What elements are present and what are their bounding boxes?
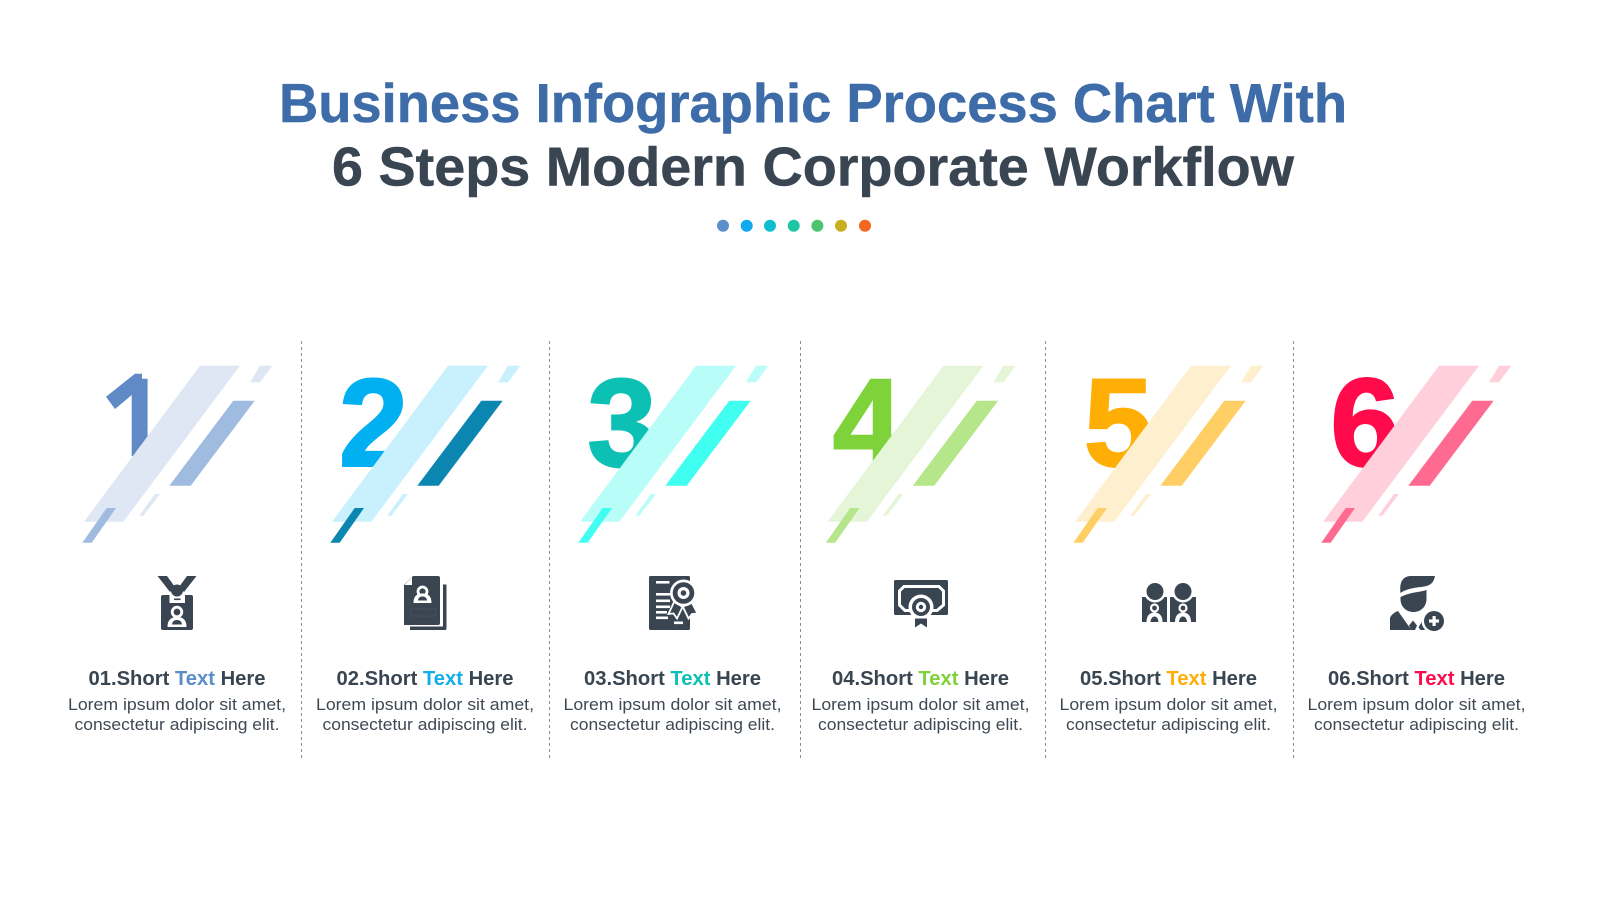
icon: two employee badges xyxy=(1142,580,1196,622)
icon: profile documents xyxy=(404,576,446,630)
step 1 text: 01.Short Text Here xyxy=(88,668,266,690)
step 6 numeral with stripes: 6 xyxy=(1330,354,1400,493)
step 4 numeral with stripes xyxy=(826,354,1016,543)
step 5 numeral with stripes: 5 xyxy=(1084,354,1153,493)
step 4 text xyxy=(812,668,1030,734)
step 2 text: Lorem ipsum dolor sit amet, xyxy=(316,695,534,714)
title: 6 Steps Modern Corporate Workflow xyxy=(332,136,1295,198)
step 4 text: Lorem ipsum dolor sit amet, xyxy=(812,695,1030,714)
step 1 text xyxy=(68,668,286,734)
step 6 text: consectetur adipiscing elit. xyxy=(1314,715,1519,734)
icon: add employee xyxy=(1390,576,1446,634)
step 5 text xyxy=(1060,668,1278,734)
step 3 numeral with stripes: 3 xyxy=(587,354,657,493)
title: Business Infographic Process Chart With xyxy=(279,73,1347,134)
step 1 numeral with stripes xyxy=(82,354,272,543)
step 4 text: consectetur adipiscing elit. xyxy=(818,715,1023,734)
icon: certificate with seal xyxy=(649,576,698,630)
step 5 text: 05.Short Text Here xyxy=(1080,668,1257,690)
title xyxy=(279,73,1347,198)
colored dots row xyxy=(717,220,871,232)
step 1 text: Lorem ipsum dolor sit amet, xyxy=(68,695,286,714)
step 6 text: Lorem ipsum dolor sit amet, xyxy=(1308,695,1526,714)
step 5 text: consectetur adipiscing elit. xyxy=(1066,715,1271,734)
step 3 text xyxy=(564,668,782,734)
step 2 text xyxy=(316,668,534,734)
step 1 text: consectetur adipiscing elit. xyxy=(74,715,280,734)
step 3 text: Lorem ipsum dolor sit amet, xyxy=(564,695,782,714)
icon: diploma with ribbon xyxy=(894,580,948,628)
step 5 numeral with stripes xyxy=(1073,354,1263,543)
step 2 text: 02.Short Text Here xyxy=(336,668,513,690)
step 2 text: consectetur adipiscing elit. xyxy=(322,715,528,734)
step 2 numeral with stripes xyxy=(330,354,520,543)
step 2 numeral with stripes: 2 xyxy=(339,354,408,493)
step 6 text xyxy=(1308,668,1526,734)
step 6 text: 06.Short Text Here xyxy=(1328,668,1505,690)
step 3 text: consectetur adipiscing elit. xyxy=(570,715,775,734)
icon: ID badge on lanyard xyxy=(158,576,196,630)
step 3 numeral with stripes xyxy=(578,354,768,543)
step 5 text: Lorem ipsum dolor sit amet, xyxy=(1060,695,1278,714)
step 4 numeral with stripes: 4 xyxy=(833,354,902,493)
step 6 numeral with stripes xyxy=(1321,354,1511,543)
step 1 numeral with stripes: 1 xyxy=(100,354,170,493)
step 3 text: 03.Short Text Here xyxy=(584,668,761,690)
step 4 text: 04.Short Text Here xyxy=(832,668,1009,690)
